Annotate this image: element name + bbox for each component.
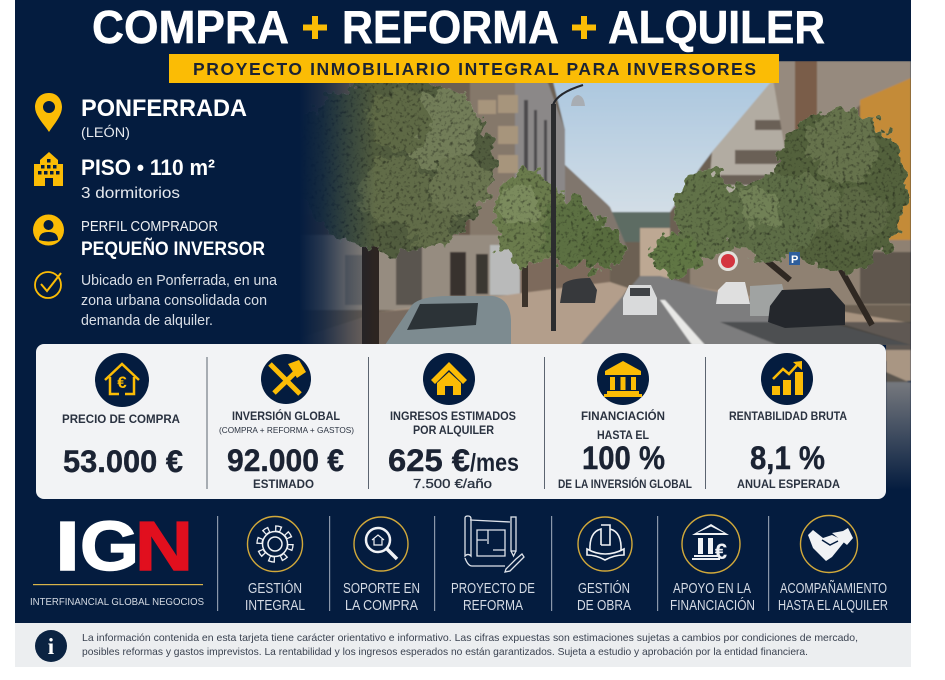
icon: bank with euro: € <box>715 539 727 564</box>
service: gestion integral <box>245 516 305 614</box>
service: acompanamiento: HASTA EL ALQUILER <box>778 598 888 614</box>
title: COMPRA <box>92 1 289 53</box>
location text: (LEÓN) <box>81 124 130 140</box>
metric: inversion global: INVERSIÓN GLOBAL <box>232 408 340 423</box>
metric: rentabilidad bruta: 8,1 % <box>750 440 825 476</box>
metric: inversion global <box>219 354 354 491</box>
metric: inversion global: ESTIMADO <box>253 477 314 491</box>
service: proyecto de reforma <box>451 516 535 614</box>
metric: ingresos por alquiler: 7.500 €/año <box>413 477 492 491</box>
location text: PONFERRADA <box>81 95 247 122</box>
title <box>92 1 825 53</box>
metric: financiacion: 100 % <box>582 440 665 476</box>
logo: IGN <box>30 507 204 608</box>
service: gestion de obra: GESTIÓN <box>578 580 630 597</box>
buyer profile text: PERFIL COMPRADOR <box>81 219 218 235</box>
location text <box>81 95 247 140</box>
right trees <box>652 109 906 325</box>
metric: rentabilidad bruta <box>729 353 847 491</box>
metric: ingresos por alquiler: /mes <box>470 449 519 477</box>
metric: financiacion: HASTA EL <box>597 428 649 442</box>
location description: demanda de alquiler. <box>81 313 213 329</box>
metric: financiacion: FINANCIACIÓN <box>581 408 665 423</box>
icon: house <box>423 353 475 405</box>
property text: 3 dormitorios <box>81 185 180 202</box>
icon: info <box>35 630 67 662</box>
icon: bank <box>597 353 649 405</box>
service: gestion integral: INTEGRAL <box>245 598 305 614</box>
service: apoyo en la financiacion: FINANCIACIÓN <box>670 597 755 614</box>
cars: P <box>791 254 798 266</box>
cars <box>385 251 845 345</box>
logo: IGN: I <box>55 507 80 585</box>
panel: property facts <box>33 93 278 329</box>
metric: financiacion: DE LA INVERSIÓN GLOBAL <box>558 476 692 491</box>
location description: Ubicado en Ponferrada, en una <box>81 273 278 289</box>
icon: rising chart <box>761 353 813 405</box>
metric: rentabilidad bruta: ANUAL ESPERADA <box>737 477 840 491</box>
metric: precio de compra: PRECIO DE COMPRA <box>62 412 180 426</box>
icon: gear <box>248 516 302 572</box>
service: gestion de obra: DE OBRA <box>577 598 631 614</box>
metric: ingresos por alquiler: INGRESOS ESTIMADOS <box>390 409 516 423</box>
location description <box>81 273 278 329</box>
metric: precio de compra: 53.000 € <box>63 443 183 479</box>
icon: hammer and wrench <box>261 354 311 404</box>
logo: IGN: G <box>80 507 139 585</box>
metric: financiacion <box>558 353 692 491</box>
icon: info: i <box>48 634 55 659</box>
property text: PISO • 110 m² <box>81 155 215 180</box>
service: gestion integral: GESTIÓN <box>248 580 302 597</box>
icon: check <box>35 272 61 298</box>
logo: IGN: INTERFINANCIAL GLOBAL NEGOCIOS <box>30 596 204 608</box>
left trees <box>293 77 622 350</box>
icon: magnifier <box>354 517 408 571</box>
service: acompanamiento <box>778 516 888 614</box>
street photo <box>280 61 911 510</box>
metric: ingresos por alquiler: 625 € <box>388 442 470 478</box>
icon: house euro: € <box>117 373 127 392</box>
service: soporte en la compra: LA COMPRA <box>345 598 418 614</box>
services strip <box>217 515 888 614</box>
location description: zona urbana consolidada con <box>81 293 267 309</box>
logo: IGN: N <box>135 507 193 585</box>
service: soporte en la compra <box>343 517 420 614</box>
icon: building <box>34 152 63 186</box>
service: apoyo en la financiacion: APOYO EN LA <box>673 581 751 597</box>
property text <box>81 155 215 202</box>
service: proyecto de reforma: PROYECTO DE <box>451 581 535 597</box>
icon: handshake <box>800 516 858 572</box>
title: ALQUILER <box>608 1 825 53</box>
metric: ingresos por alquiler <box>388 353 519 491</box>
service: acompanamiento: ACOMPAÑAMIENTO <box>780 580 887 597</box>
disclaimer <box>15 623 911 667</box>
icon: person <box>33 214 64 246</box>
buyer profile text <box>81 219 265 260</box>
metric: inversion global: (COMPRA + REFORMA + GASTOS) <box>219 425 354 435</box>
subtitle banner: PROYECTO INMOBILIARIO INTEGRAL PARA INVERSORES <box>193 59 756 79</box>
panel: key figures <box>36 344 886 499</box>
buyer profile text: PEQUEÑO INVERSOR <box>81 238 265 260</box>
service: apoyo en la financiacion <box>670 515 755 614</box>
title: REFORMA <box>342 1 559 53</box>
disclaimer: La información contenida en esta tarjeta tiene carácter orientativo e informativo. Las cifras expuestas son estimaciones sujetas a cambios por condiciones de mercado, <box>82 633 858 644</box>
icon: blueprint <box>465 516 524 572</box>
metric: rentabilidad bruta: RENTABILIDAD BRUTA <box>729 409 847 423</box>
icon: helmet <box>578 517 632 571</box>
metric: ingresos por alquiler: POR ALQUILER <box>413 423 494 437</box>
service: soporte en la compra: SOPORTE EN <box>343 581 420 597</box>
disclaimer: posibles reformas y gastos imprevistos. La rentabilidad y los ingresos esperados no están garantizados. Sujeta a estudio y aprobación por la entidad financiera. <box>82 647 808 658</box>
metric: inversion global: 92.000 € <box>227 442 344 478</box>
icon: location pin <box>35 93 62 132</box>
subtitle banner <box>169 54 779 83</box>
metric: precio de compra <box>62 353 183 479</box>
service: proyecto de reforma: REFORMA <box>463 598 523 614</box>
service: gestion de obra <box>577 517 632 614</box>
street lamp <box>551 85 585 331</box>
photo fade <box>280 83 368 344</box>
